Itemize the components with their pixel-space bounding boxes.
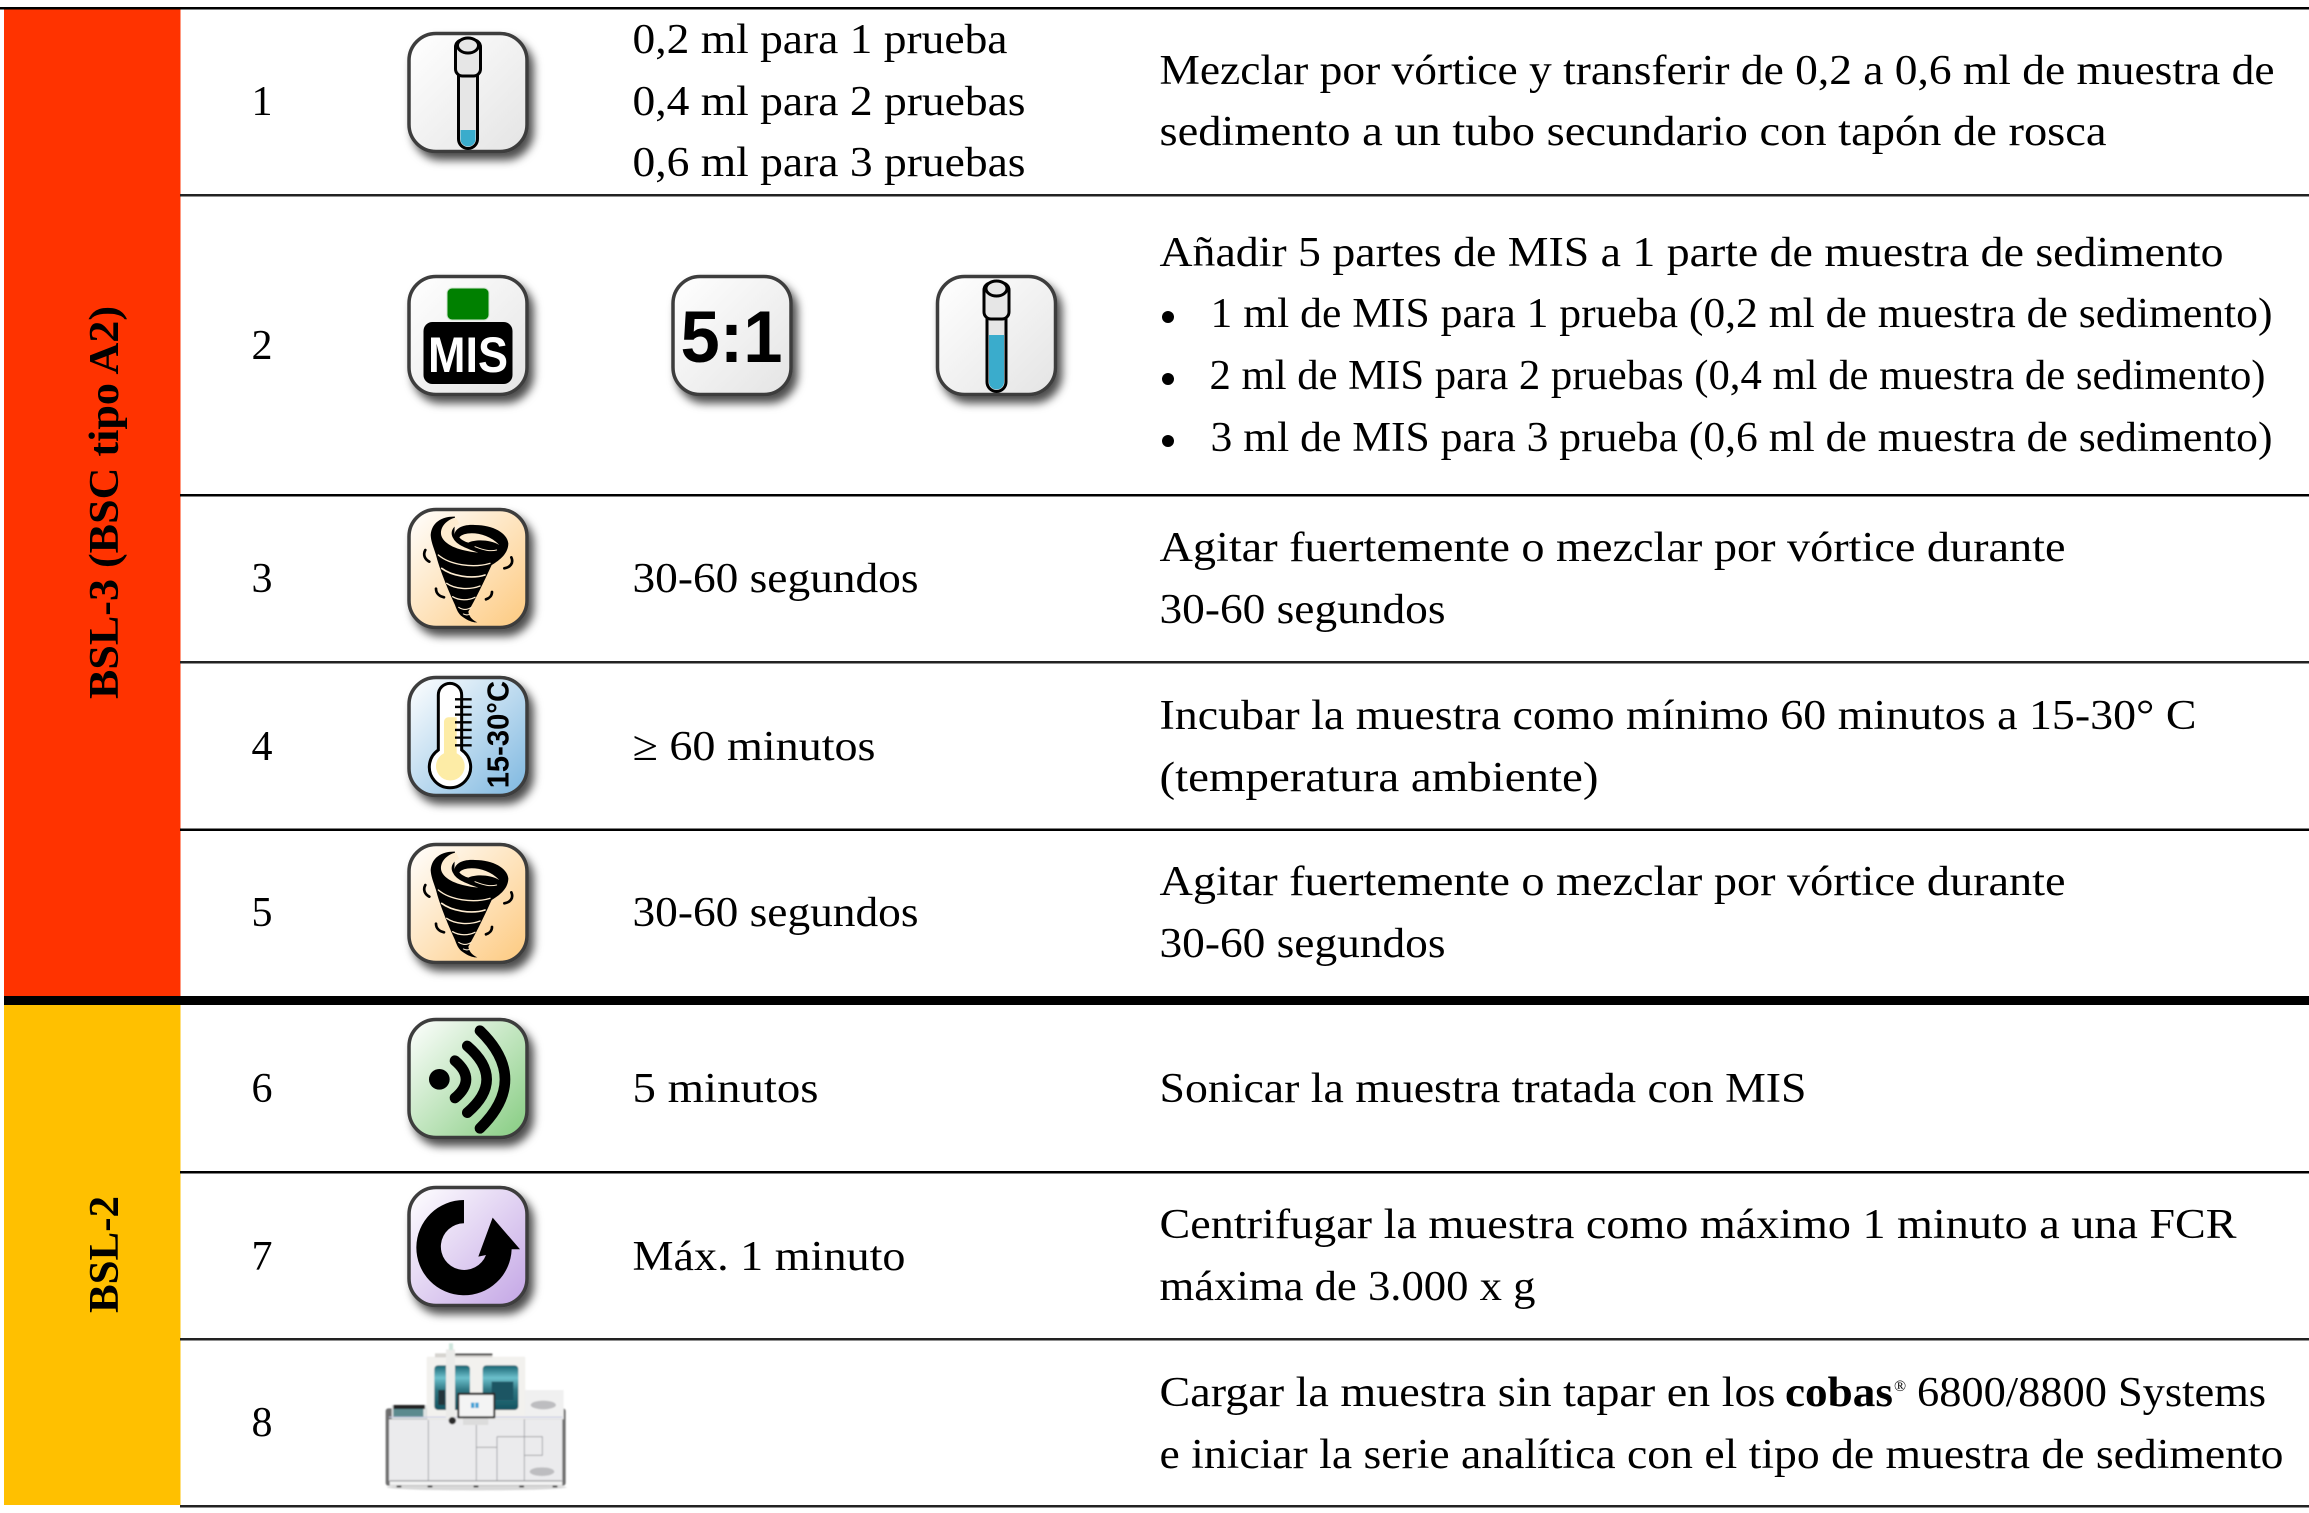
instructions 2: Añadir 5 partes de MIS a 1 parte de muestra de sedimento bbox=[1160, 230, 2224, 276]
panel: BSL-3 band bbox=[4, 9, 180, 997]
icon: vortex bbox=[409, 510, 527, 628]
instructions 2 bbox=[1160, 230, 2272, 461]
step number 3: 3 bbox=[252, 556, 272, 602]
icon: ratio 5:1 bbox=[673, 276, 791, 394]
instructions 4 bbox=[1160, 693, 2196, 801]
step number 4: 4 bbox=[252, 724, 272, 770]
instructions 8: 6800/8800 Systems bbox=[1917, 1370, 2266, 1416]
instructions 8: Cargar la muestra sin tapar en los bbox=[1160, 1370, 1776, 1416]
step number 1: 1 bbox=[252, 79, 272, 125]
icon: vortex bbox=[409, 844, 527, 962]
icon: cobas analyzer bbox=[386, 1343, 567, 1490]
label: BSL-3 (BSC tipo A2): BSL-3 (BSC tipo A2) bbox=[82, 306, 128, 699]
instructions 8: ® bbox=[1894, 1378, 1906, 1395]
row 2 bbox=[252, 230, 2272, 461]
instructions 7 bbox=[1160, 1202, 2236, 1310]
row 4 bbox=[252, 678, 2196, 801]
instructions 5: 30-60 segundos bbox=[1160, 921, 1446, 967]
icon: MIS bottle: MIS bbox=[428, 327, 508, 383]
icon: MIS bottle bbox=[409, 276, 527, 394]
icon: tube with small sample bbox=[409, 34, 527, 152]
icon: thermometer 15-30°C bbox=[409, 678, 527, 796]
step number 7: 7 bbox=[252, 1234, 272, 1280]
icon: tube with sample bbox=[938, 276, 1056, 394]
row 3 bbox=[252, 510, 2066, 633]
duration 5: 30-60 segundos bbox=[632, 890, 918, 936]
instructions 6: Sonicar la muestra tratada con MIS bbox=[1160, 1066, 1806, 1112]
instructions 7: máxima de 3.000 x g bbox=[1160, 1264, 1536, 1310]
icon: centrifuge bbox=[409, 1188, 527, 1306]
instructions 1: Mezclar por vórtice y transferir de 0,2 a 0,6 ml de muestra de bbox=[1160, 48, 2274, 94]
volumes: 0,6 ml para 3 pruebas bbox=[632, 140, 1026, 186]
panel: BSL-2 band bbox=[4, 1004, 180, 1505]
step number 6: 6 bbox=[252, 1066, 272, 1112]
volumes: 0,4 ml para 2 pruebas bbox=[632, 79, 1026, 125]
instructions 3: Agitar fuertemente o mezclar por vórtice durante bbox=[1160, 525, 2066, 571]
row 5 bbox=[252, 844, 2066, 967]
icon: sonication bbox=[409, 1020, 527, 1138]
instructions 8: cobas bbox=[1785, 1370, 1893, 1416]
instructions 8 bbox=[1160, 1370, 2284, 1478]
step number 2: 2 bbox=[252, 323, 272, 369]
step number 8: 8 bbox=[252, 1400, 272, 1446]
instructions 1 bbox=[1160, 48, 2274, 155]
duration 7: Máx. 1 minuto bbox=[632, 1234, 906, 1280]
icon: ratio 5:1: 5:1 bbox=[680, 297, 782, 378]
row 1 bbox=[252, 17, 2274, 186]
instructions 1: sedimento a un tubo secundario con tapón de rosca bbox=[1160, 109, 2107, 155]
duration 6: 5 minutos bbox=[632, 1066, 818, 1112]
step number 5: 5 bbox=[252, 890, 272, 936]
instructions 2: 3 ml de MIS para 3 prueba (0,6 ml de muestra de sedimento) bbox=[1210, 415, 2272, 461]
row 8 bbox=[252, 1343, 2284, 1490]
row 6 bbox=[252, 1020, 1806, 1138]
instructions 3 bbox=[1160, 525, 2066, 633]
instructions 4: Incubar la muestra como mínimo 60 minutos a 15-30° C bbox=[1160, 693, 2196, 739]
volumes bbox=[632, 17, 1026, 186]
instructions 4: (temperatura ambiente) bbox=[1160, 755, 1598, 801]
instructions 5 bbox=[1160, 859, 2066, 967]
instructions 7: Centrifugar la muestra como máximo 1 minuto a una FCR bbox=[1160, 1202, 2236, 1248]
instructions 2: 1 ml de MIS para 1 prueba (0,2 ml de muestra de sedimento) bbox=[1210, 291, 2272, 337]
instructions 2: 2 ml de MIS para 2 pruebas (0,4 ml de muestra de sedimento) bbox=[1210, 353, 2266, 399]
instructions 3: 30-60 segundos bbox=[1160, 587, 1446, 633]
duration 4: ≥ 60 minutos bbox=[632, 724, 876, 770]
icon: thermometer 15-30°C: 15-30°C bbox=[482, 681, 516, 788]
instructions 5: Agitar fuertemente o mezclar por vórtice durante bbox=[1160, 859, 2066, 905]
row 7 bbox=[252, 1188, 2236, 1310]
volumes: 0,2 ml para 1 prueba bbox=[632, 17, 1008, 63]
duration 3: 30-60 segundos bbox=[632, 556, 918, 602]
instructions 8: e iniciar la serie analítica con el tipo de muestra de sedimento bbox=[1160, 1432, 2284, 1478]
label: BSL-2: BSL-2 bbox=[82, 1196, 128, 1313]
